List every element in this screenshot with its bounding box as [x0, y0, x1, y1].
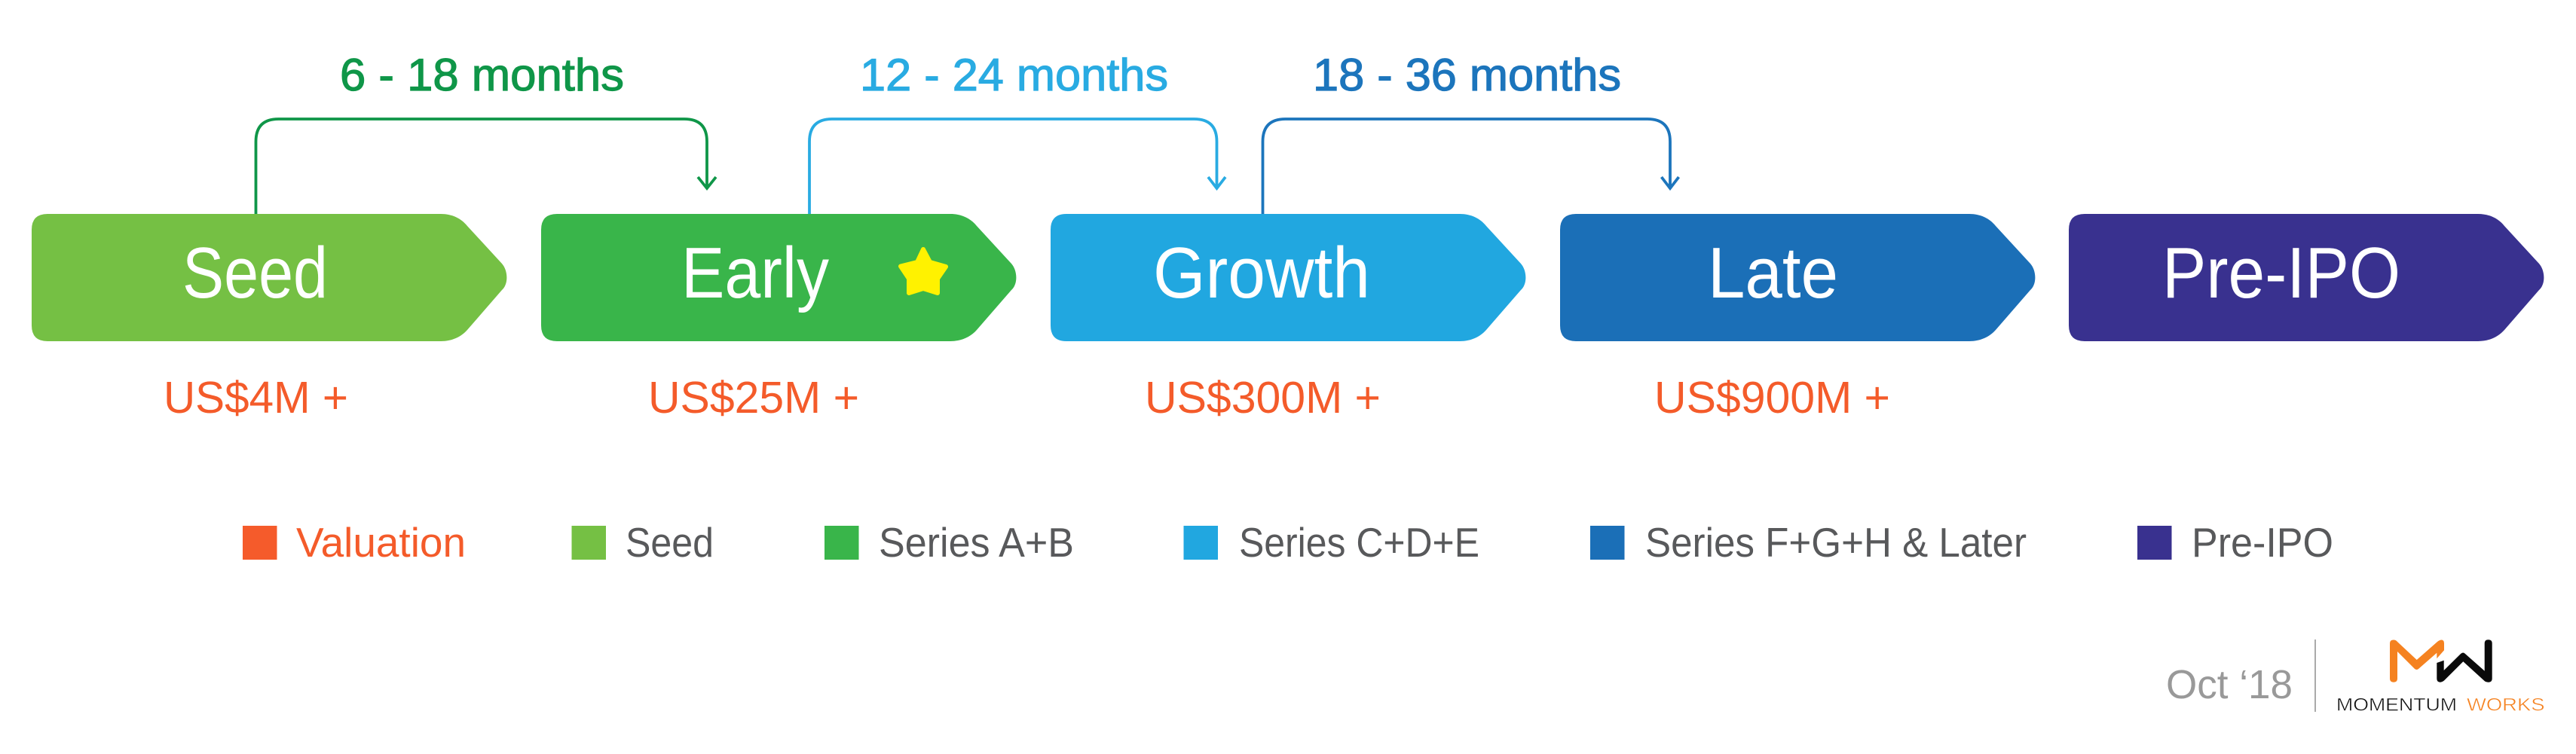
- legend item: Pre-IPO: Pre-IPO: [2192, 519, 2333, 566]
- footer divider: [2314, 640, 2316, 712]
- legend item: Valuation: Valuation: [296, 519, 466, 566]
- logo mark: M: [2390, 640, 2444, 682]
- legend: [243, 519, 2333, 566]
- duration label: 18 - 36 months: 18 - 36 months: [1313, 50, 1621, 100]
- stage: Early: Early: [681, 233, 829, 313]
- arrow: growth to late: [1263, 119, 1679, 214]
- stage: Growth: [1051, 214, 1525, 341]
- legend item: Series F+G+H & Later: Series F+G+H & Later: [1645, 519, 2027, 566]
- stage: Late: Late: [1708, 233, 1838, 313]
- legend item: Series C+D+E: Series C+D+E: [1239, 519, 1479, 566]
- logo mark: W: [2437, 640, 2492, 682]
- legend item: Series A+B: Series A+B: [879, 519, 1074, 566]
- stage: Seed: Seed: [182, 233, 328, 313]
- valuation: growth: US$300M +: [1145, 373, 1381, 423]
- icon: yellow star: [901, 249, 946, 293]
- stage: Late: [1560, 214, 2035, 341]
- arrow: seed to early: [256, 119, 716, 214]
- stage: Pre-IPO: [2069, 214, 2544, 341]
- valuation: seed: US$4M +: [164, 373, 348, 423]
- logo wordmark: WORKS: [2467, 694, 2544, 716]
- stage: Growth: Growth: [1153, 233, 1370, 313]
- arrow: early to growth: [809, 119, 1225, 214]
- stage: Seed: [32, 214, 506, 341]
- stage: Early: [541, 214, 1016, 341]
- valuation: early: US$25M +: [648, 373, 859, 423]
- logo: Momentum Works: [2336, 640, 2544, 716]
- duration label: 12 - 24 months: 12 - 24 months: [860, 50, 1168, 100]
- legend item: Seed: Seed: [626, 519, 714, 566]
- legend item: Seed: [571, 519, 714, 566]
- duration label: 6 - 18 months: 6 - 18 months: [340, 50, 624, 100]
- legend item: Pre-IPO: [2137, 519, 2333, 566]
- logo wordmark: MOMENTUM: [2336, 694, 2457, 716]
- date stamp: Oct ‘18: [2166, 662, 2293, 707]
- valuation: late: US$900M +: [1654, 373, 1890, 423]
- stage: Pre-IPO: Pre-IPO: [2162, 233, 2400, 313]
